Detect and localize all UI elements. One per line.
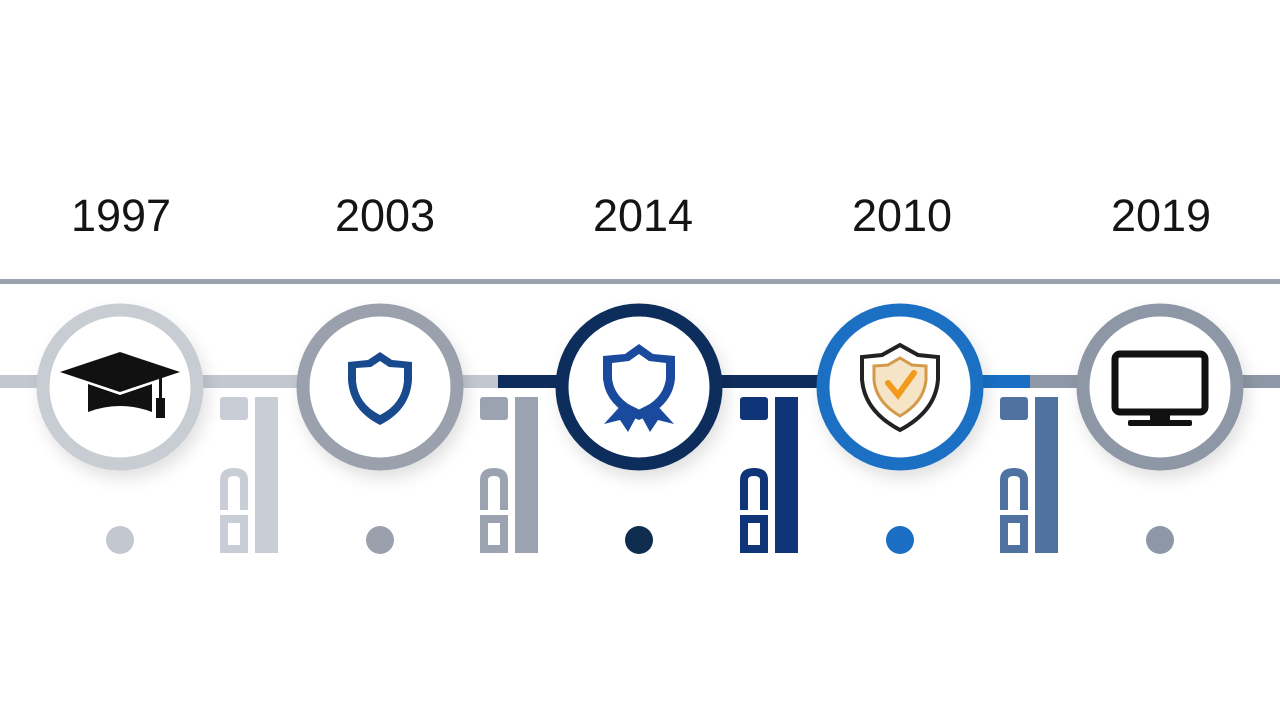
top divider line [0,279,1280,284]
glyph blocks [220,397,1058,553]
connector line [0,375,1280,388]
circle 1997: graduation cap [43,310,197,464]
year labels: 2019 [1111,190,1211,241]
year labels: 2010 [852,190,952,241]
circle 2019: monitor [1083,310,1237,464]
icon: shield [348,352,412,425]
year labels: 2014 [593,190,693,241]
icon: badge with checkmark [862,345,938,430]
icon: monitor [1115,354,1205,426]
circle 2003: shield [303,310,457,464]
icon: award shield [603,344,675,432]
circle 2014: ribbon shield [562,310,716,464]
circle 2010: badge with check [823,310,977,464]
year labels: 2003 [335,190,435,241]
icon: graduation cap [60,352,180,418]
dots [106,526,1174,554]
year labels [71,190,1211,241]
year labels: 1997 [71,190,171,241]
